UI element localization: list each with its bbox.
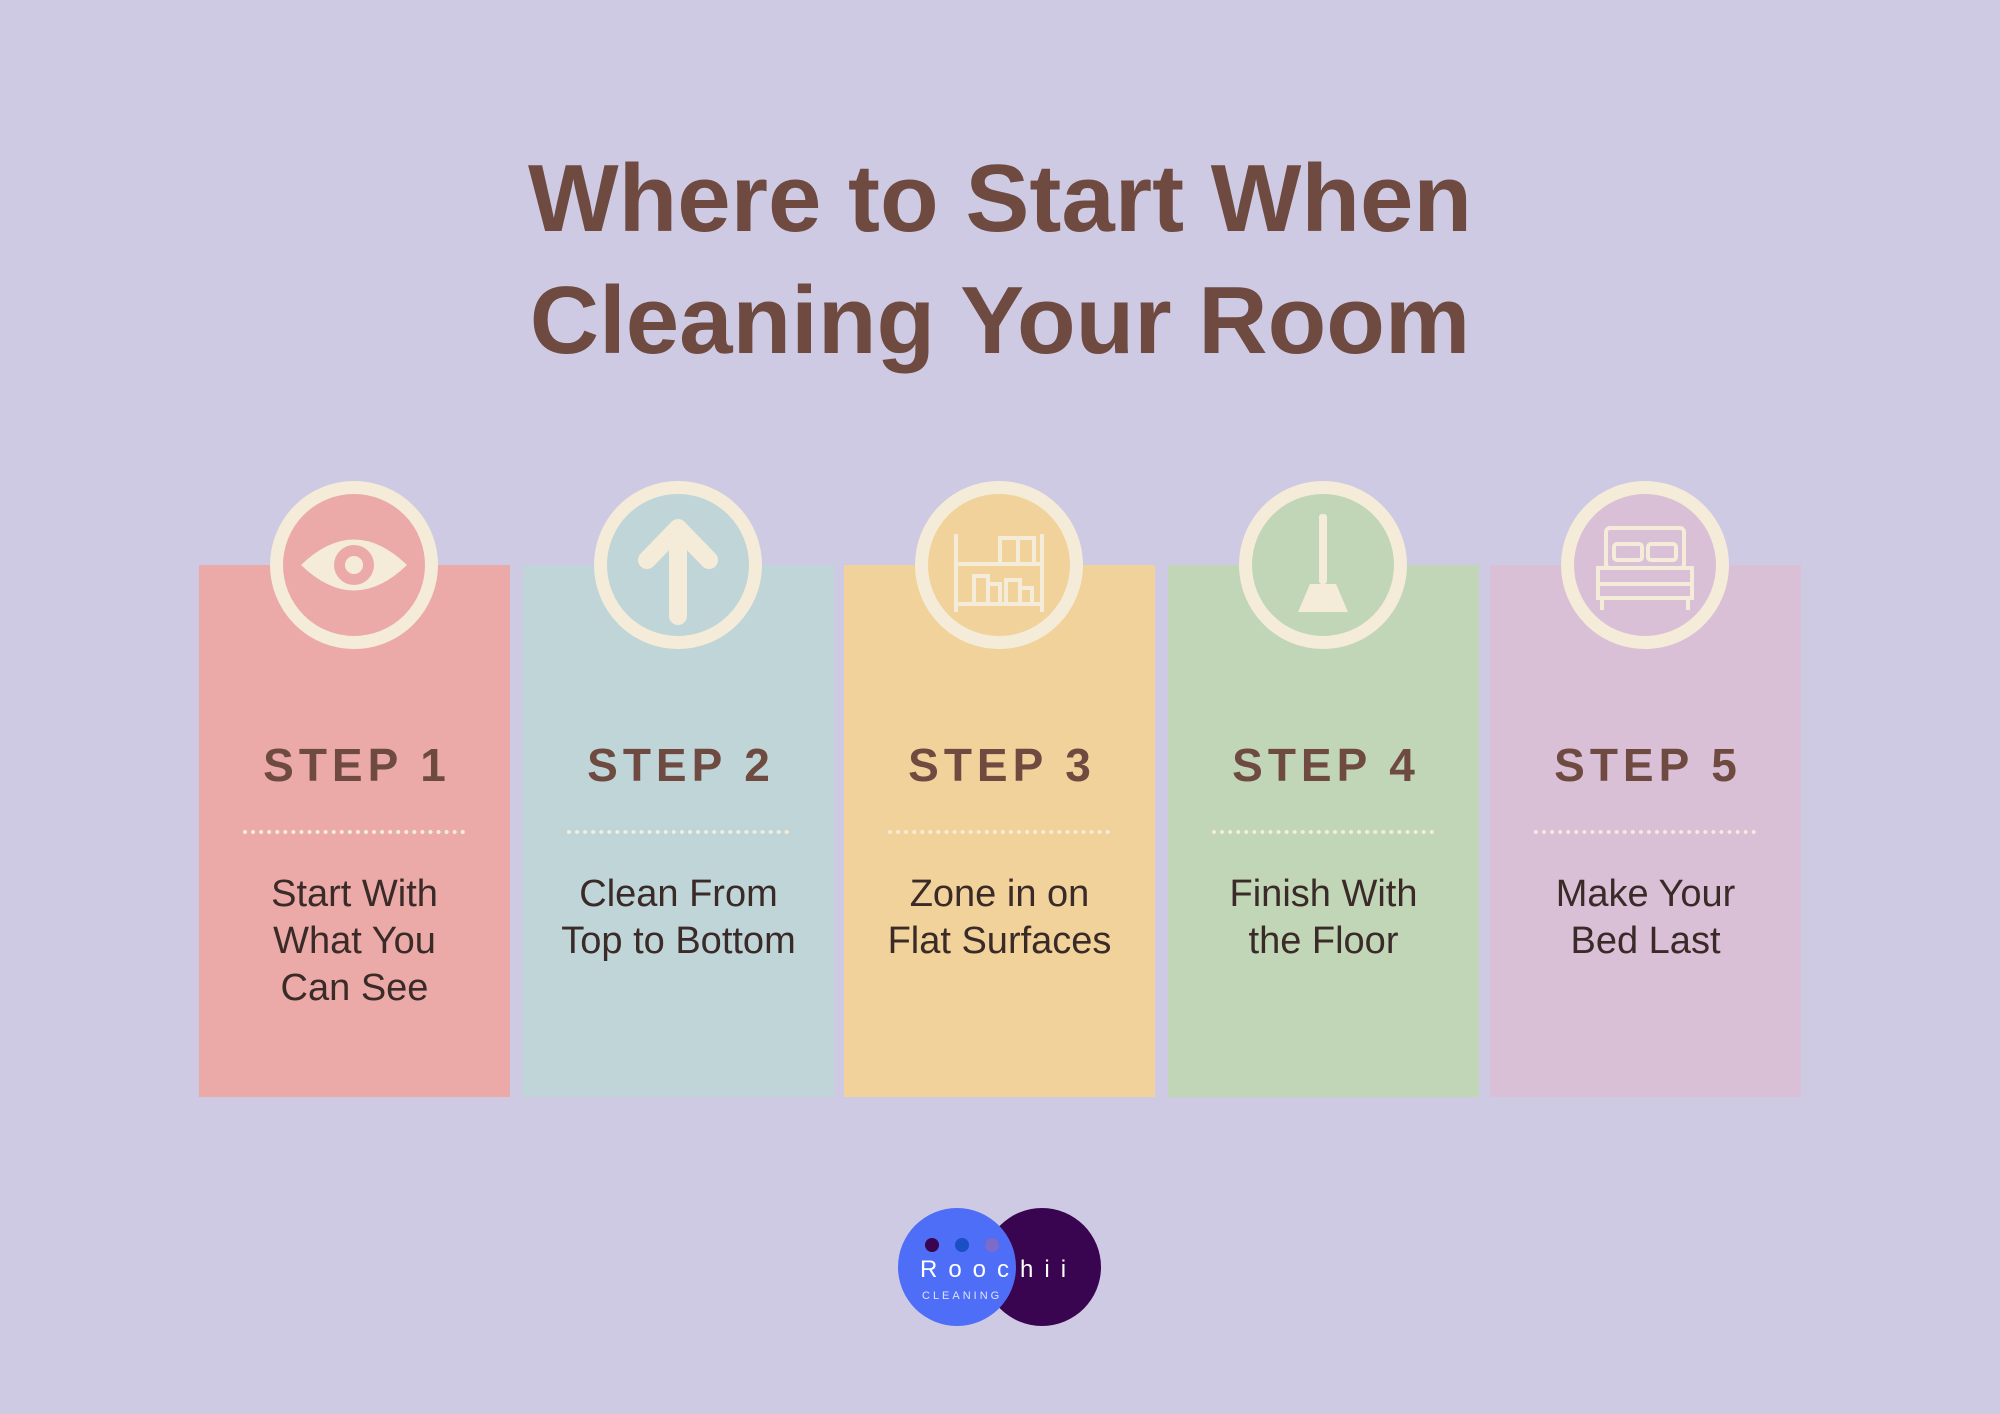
icon: eye	[270, 481, 438, 649]
panel: step 1	[199, 565, 510, 1097]
text	[1230, 873, 1417, 962]
step label: STEP 1	[263, 739, 451, 791]
text	[888, 873, 1111, 962]
title: Cleaning Your Room	[530, 267, 1470, 374]
step label: STEP 3	[908, 739, 1096, 791]
panel: step 2	[523, 565, 834, 1097]
logo	[898, 1208, 1101, 1326]
text: Start With	[271, 873, 438, 915]
panel: step 3	[844, 565, 1155, 1097]
panel: step 5	[1490, 565, 1801, 1097]
title	[528, 145, 1472, 374]
step label: STEP 4	[1232, 739, 1420, 791]
text	[271, 873, 438, 1009]
text: Can See	[281, 967, 428, 1009]
title: Where to Start When	[528, 145, 1472, 252]
logo: CLEANING	[922, 1290, 1002, 1302]
text: What You	[273, 920, 436, 962]
text: Zone in on	[910, 873, 1089, 915]
panel: step 4	[1168, 565, 1479, 1097]
text	[561, 873, 796, 962]
text	[1556, 873, 1735, 962]
text: the Floor	[1249, 920, 1398, 962]
icon: broom	[1239, 481, 1407, 649]
text: Flat Surfaces	[888, 920, 1111, 962]
icon: bed	[1561, 481, 1729, 649]
icon: shelf	[915, 481, 1083, 649]
text: Top to Bottom	[561, 920, 796, 962]
step label: STEP 5	[1554, 739, 1742, 791]
step label: STEP 2	[587, 739, 775, 791]
text: Bed Last	[1570, 920, 1720, 962]
text: Finish With	[1230, 873, 1417, 915]
text: Make Your	[1556, 873, 1735, 915]
icon: arrow up	[594, 481, 762, 649]
logo: Roochii	[920, 1256, 1077, 1283]
text: Clean From	[579, 873, 778, 915]
